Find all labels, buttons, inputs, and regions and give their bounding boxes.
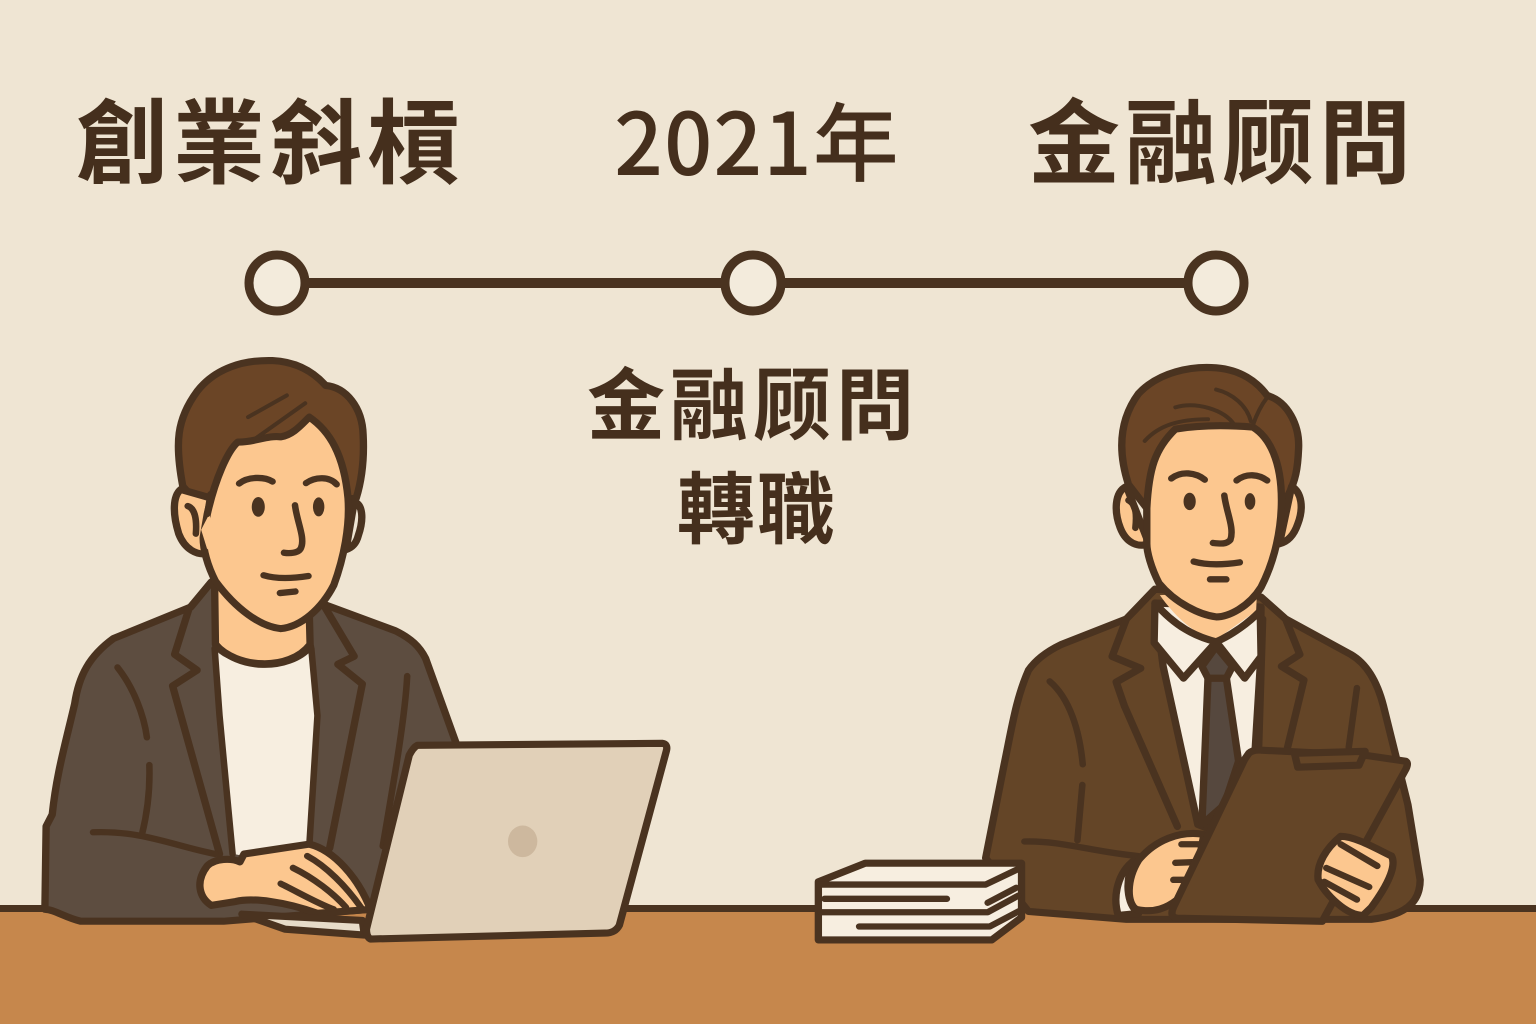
figure: financial advisor with clipboard <box>818 367 1420 940</box>
hair <box>1122 367 1299 508</box>
face <box>203 417 348 629</box>
suit jacket <box>986 589 1420 919</box>
keyboard base <box>242 914 364 935</box>
laptop <box>366 743 667 939</box>
lapels <box>173 582 220 854</box>
center caption: career change to financial advisor <box>587 344 919 560</box>
timeline <box>249 255 1244 311</box>
shirt <box>1155 603 1261 828</box>
ears <box>1116 486 1149 545</box>
shirt cuff <box>1116 860 1139 915</box>
right hand <box>1318 836 1393 915</box>
stack of books <box>818 863 1022 940</box>
face <box>1147 426 1281 617</box>
ears <box>174 489 211 554</box>
collar line <box>216 644 311 665</box>
eyes <box>252 497 324 517</box>
hair <box>178 361 363 514</box>
timeline node: 2021 <box>725 255 781 311</box>
eyebrows, nose, mouth <box>239 478 337 593</box>
jacket creases <box>93 667 407 854</box>
heading: financial advisor: 金融顾問 <box>1028 70 1416 203</box>
laptop logo <box>508 826 537 857</box>
timeline node: end <box>1188 255 1244 311</box>
figure: entrepreneur with laptop <box>45 361 667 939</box>
center caption: career change to financial advisor: 金融顾問 <box>587 344 919 456</box>
eyebrows, nose, mouth <box>1171 473 1267 579</box>
lapels <box>1112 589 1177 826</box>
hair strands <box>248 395 305 441</box>
suit creases <box>1024 681 1357 856</box>
jacket <box>45 582 456 921</box>
desk <box>0 905 1536 1024</box>
tie <box>1202 647 1239 824</box>
heading: year 2021: 2021年 <box>615 78 901 199</box>
clipboard <box>1172 750 1407 921</box>
neck <box>215 585 310 664</box>
hand on keyboard <box>200 844 370 913</box>
timeline node: start <box>249 255 305 311</box>
clipboard clip <box>1294 751 1365 767</box>
center caption: career change to financial advisor: 轉職 <box>677 448 837 560</box>
collar <box>1154 603 1216 678</box>
eyes <box>1184 493 1255 510</box>
shirt <box>218 650 315 856</box>
left hand <box>1129 834 1204 911</box>
heading: startup slash career: 創業斜槓 <box>76 70 464 203</box>
hair strands <box>1145 390 1267 441</box>
neck <box>1160 591 1257 639</box>
